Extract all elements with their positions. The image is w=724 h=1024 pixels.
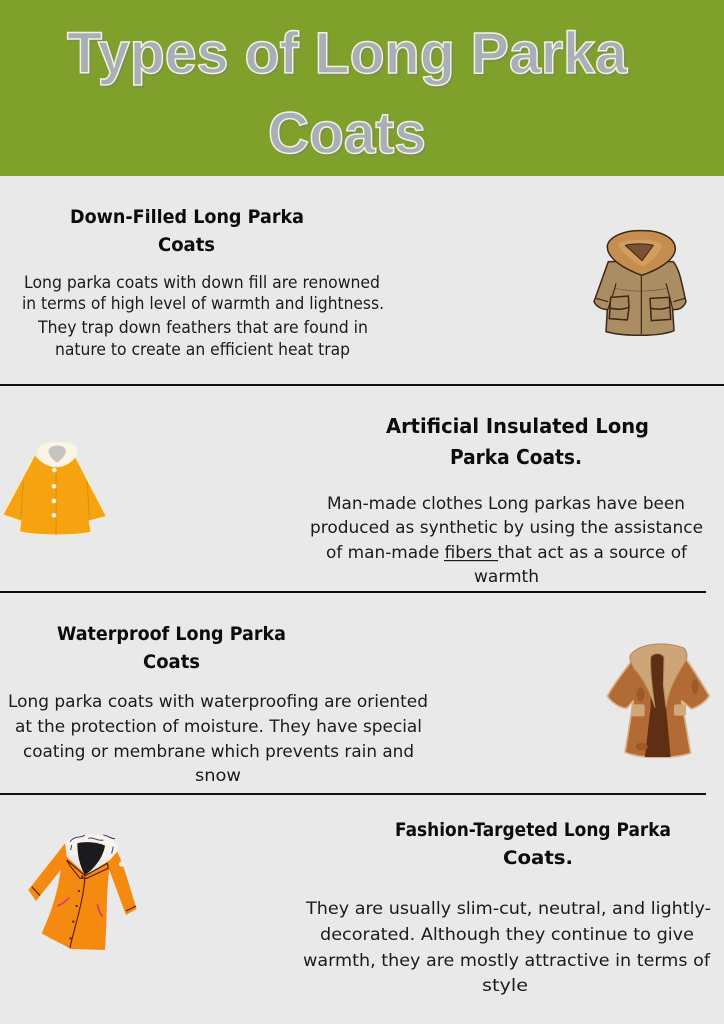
text: waterproof description <box>8 692 428 785</box>
header banner <box>0 0 724 176</box>
heading: fashion-targeted: Coats. <box>503 847 573 869</box>
panel: waterproof <box>8 623 709 785</box>
text: artificial insulated description <box>310 494 703 586</box>
heading: down-filled: Down-Filled Long Parka <box>70 206 304 228</box>
text: down-filled description: in terms of high level of warmth and lightness. <box>22 294 384 313</box>
heading: artificial insulated: Parka Coats. <box>450 445 582 469</box>
panel: down-filled <box>22 206 686 359</box>
text: artificial insulated description: Man-made clothes Long parkas have been <box>327 494 685 513</box>
heading: waterproof <box>57 623 286 673</box>
text: artificial insulated description: warmth <box>474 567 539 586</box>
text: waterproof description: Long parka coats with waterproofing are oriented <box>8 692 428 711</box>
title: Types of Long Parka <box>69 23 630 88</box>
title: Coats <box>270 103 428 168</box>
heading: waterproof: Coats <box>143 651 200 673</box>
text: waterproof description: at the protection of moisture. They have special <box>15 717 422 736</box>
heading: down-filled: Coats <box>158 234 215 256</box>
heading: artificial insulated <box>386 414 649 469</box>
text: fashion-targeted description: style <box>482 976 528 995</box>
title <box>67 21 630 168</box>
text: waterproof description: snow <box>195 766 241 785</box>
heading: waterproof: Waterproof Long Parka <box>57 623 286 645</box>
panel: fashion-targeted <box>28 819 711 995</box>
divider <box>0 793 706 795</box>
text: fashion-targeted description: decorated. Although they continue to give <box>320 925 694 944</box>
divider <box>0 384 724 386</box>
icon: yellow coat <box>3 442 107 535</box>
text: down-filled description: Long parka coats with down fill are renowned <box>24 273 380 292</box>
text: fashion-targeted description: They are usually slim-cut, neutral, and lightly- <box>305 899 711 918</box>
icon: brown parka with fur hood <box>594 231 686 335</box>
panel: artificial insulated <box>3 414 703 586</box>
text: fashion-targeted description <box>303 899 711 995</box>
heading: artificial insulated: Artificial Insulated Long <box>386 414 649 438</box>
text: down-filled description <box>22 273 384 359</box>
title: Coats <box>268 101 426 166</box>
text: down-filled description: nature to create an efficient heat trap <box>55 340 350 359</box>
heading: down-filled <box>70 206 304 256</box>
icon: brown fur-collar coat <box>607 644 709 757</box>
text: artificial insulated description: of man-made fibers that act as a source of <box>326 543 688 562</box>
text: waterproof description: coating or membrane which prevents rain and <box>23 742 414 761</box>
text: fashion-targeted description: warmth, they are mostly attractive in terms of <box>303 951 711 970</box>
text: down-filled description: They trap down feathers that are found in <box>37 318 368 337</box>
heading: fashion-targeted: Fashion-Targeted Long Parka <box>395 819 671 841</box>
icon: orange coat <box>28 834 137 950</box>
text: artificial insulated description: produced as synthetic by using the assistance <box>310 518 703 537</box>
divider <box>0 591 706 593</box>
heading: fashion-targeted <box>395 819 671 869</box>
title: Types of Long Parka <box>67 21 628 86</box>
